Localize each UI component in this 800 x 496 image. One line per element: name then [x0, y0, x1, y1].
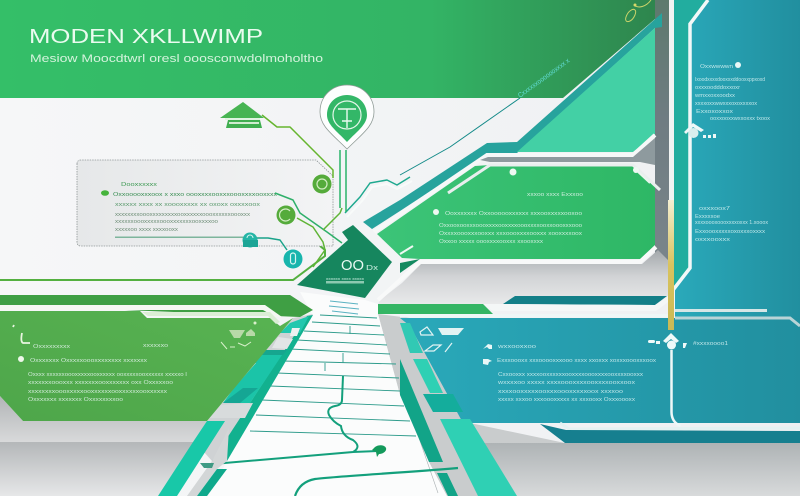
text block: right column lower: oxxxoox7 [699, 206, 730, 212]
text block: teal panel [483, 341, 728, 403]
left gray floor [0, 396, 207, 496]
dark teal strip [503, 296, 667, 305]
icon: top ornament [626, 0, 651, 22]
text block: teal panel: Cxxooxxx xxxxooxxxxxxooxxxxoooxxxxooxxxxooxxx [498, 372, 644, 378]
text block: left panel: Oxxxxxxxxx [33, 344, 71, 350]
text block: left callout: xxxxxoo xxxx xxxxooxx [115, 227, 179, 233]
text block: left panel: Oxxxxxxx Oxxxxxoooxxxxxxxx xxxxxxx [30, 358, 148, 364]
text block: green right: Oxxoo xxxxx oooxxxxooxxx xxooxxxx [439, 239, 544, 245]
thin teal diagonal line [400, 98, 520, 175]
text block: left panel: xxxxxxxxoooxxxxxooxxxxxxooxxxxxxooxxxxxx [28, 389, 168, 395]
text block: teal panel: #xxxxoooo1 [693, 341, 728, 347]
text block: left panel: Oxxxxxxx xxxxxxx Oxxxxxxxxoo [28, 397, 123, 403]
light teal triangle panel [517, 28, 655, 152]
icons: left panel [221, 322, 256, 349]
diagonal teal band [363, 13, 662, 229]
icon: map pin [320, 85, 374, 149]
icon: green circle one [312, 174, 332, 194]
text block: left callout: Oxxooooxxxoox x xxxo oooxxxxooxxxoooxxxxooxxxx [113, 192, 278, 198]
left base line [0, 246, 325, 280]
gray gutter right of road [378, 314, 565, 496]
subtitle: Mesiow Moocdtwrl oresl ooosconwdolmoholtho [30, 53, 323, 65]
gray floor right [472, 443, 800, 496]
text block: green right [433, 192, 583, 245]
dark green wedge [400, 259, 420, 273]
teal rotated caption: Cxxxxxxooooooxxxx x [517, 57, 572, 100]
text block: right column upper: Ixoodxxxxdooxxxddooxxppxoxd [695, 77, 765, 83]
text block: right column upper: oxxxoodddoxxoxr [695, 85, 740, 91]
text block: right column upper: Exxoxoxxox [696, 109, 734, 115]
text block: right column lower: Exxxxxoe [695, 214, 720, 220]
panel: green left [0, 295, 313, 421]
diamond value: OO [341, 257, 364, 274]
panel: teal lower [400, 314, 800, 429]
text block: left callout: xxxxxxoooxxxxxoooxxxxxxxooxxxxoo [115, 219, 218, 225]
icon: roof [220, 102, 264, 128]
gray shadow area [378, 250, 668, 304]
icon: teal pin [242, 232, 258, 248]
white strip [483, 297, 668, 311]
text block: teal panel: wxxooxxoo [498, 344, 536, 350]
icon: green circle two [276, 206, 296, 224]
text block: right column lower: Exxoooxxxxxoxoxxxoxxxx [695, 229, 766, 235]
text block: right column upper: wmxxoxxoodxx [695, 93, 736, 99]
road left bands [135, 314, 313, 496]
text block: left panel [13, 325, 187, 403]
panel: diamond [297, 225, 392, 298]
dark teal base strip [540, 424, 800, 443]
text block: left panel: Oxxxx xxxxxxoooxxxxxooxxxxxx ooxxxxxooxxxxxx xxxxxo I [28, 372, 187, 378]
text block: right column upper: ooxxooxxwxxoxxx txoox [710, 116, 771, 122]
white chevron line two [448, 165, 660, 193]
text block: teal panel: xxxxooxxxxxooxxxoooxxxxxoox xxxxoo [498, 389, 623, 395]
shadow strip [480, 138, 655, 165]
text block: right column lower: xxxxoooxoooxxxxoxxx 1.xooox [695, 220, 769, 226]
icon: lower column node [648, 333, 687, 350]
icon: path marker [372, 445, 386, 457]
diamond caption: xxxxxx xxxx xxxxx [326, 276, 364, 281]
callout box: left [77, 160, 333, 246]
gold bar [668, 200, 674, 330]
right teal column [655, 0, 800, 320]
road path [213, 376, 378, 464]
text block: left callout [101, 182, 278, 238]
white lower chevron [378, 247, 656, 300]
icon: upper column node [684, 123, 716, 138]
text block: right column upper: Oxxwwwwn [700, 64, 733, 70]
white road [208, 292, 458, 496]
icons: teal panel [420, 327, 464, 352]
text block: left callout: Dooxxxxxx [121, 182, 157, 188]
panel: diamond: Dx [366, 265, 379, 272]
text block: right column lower [695, 206, 769, 243]
road right bands [400, 323, 517, 496]
title: MODEN XKLLWIMP [29, 26, 263, 48]
text block: right column upper [695, 62, 771, 122]
text block: green right: Oxxxxoooxxxooxxx xxxoooxxxxooxxx xooxxxxoox [439, 231, 583, 237]
text block: teal panel: Exxxoooxx xxxooooxxxooo xxxx xxoxxx xoxxxoooxxxoox [497, 358, 657, 364]
road lower path [295, 468, 458, 496]
text block: left callout: xxxxxx xxxx xx xoooxxxxx xx oxoxx oxxxxoox [115, 202, 261, 208]
green strip [378, 304, 493, 314]
text block: teal panel: xxxxx xxxoo xxxoooxxxxx xx xxxooxx Oxxxoooxx [498, 397, 636, 403]
panel: green right [377, 165, 660, 259]
text block: right column lower: oxxxooxxx [695, 237, 731, 243]
text block: left panel: xxxxxxxoooxxx xxxxxxxooxxxxxxx oxx Oxxxxxoo [28, 380, 173, 386]
connector lines [243, 115, 412, 267]
text block: green right: xxxoo xxxx Exxxoo [527, 192, 583, 198]
text block: green right: Ooxxxxxxx Oxxoooooxxxxxx xxxooxxxxxooxoo [445, 211, 582, 217]
text block: green right: Oxxooxooxxxoooxxxxooxxxxoooxxxxooxxoooxxxooo [439, 223, 582, 229]
text block: left panel: xxxxxxo [143, 343, 168, 349]
text block: left callout: xxxxxxxxoooxxxxxxxxxooxxxxxxoooxxxxxxoooxxx [115, 212, 251, 218]
text block: right column upper: xxxxoxxwwxxxoxoxxxxox [695, 101, 758, 107]
icon: teal circle [284, 250, 302, 268]
header band [0, 0, 670, 98]
text block: teal panel: wxxxxoo xxxxx xxxxoooxxxxooxxxxooxxoox [498, 380, 636, 386]
white chevron line [374, 135, 655, 232]
